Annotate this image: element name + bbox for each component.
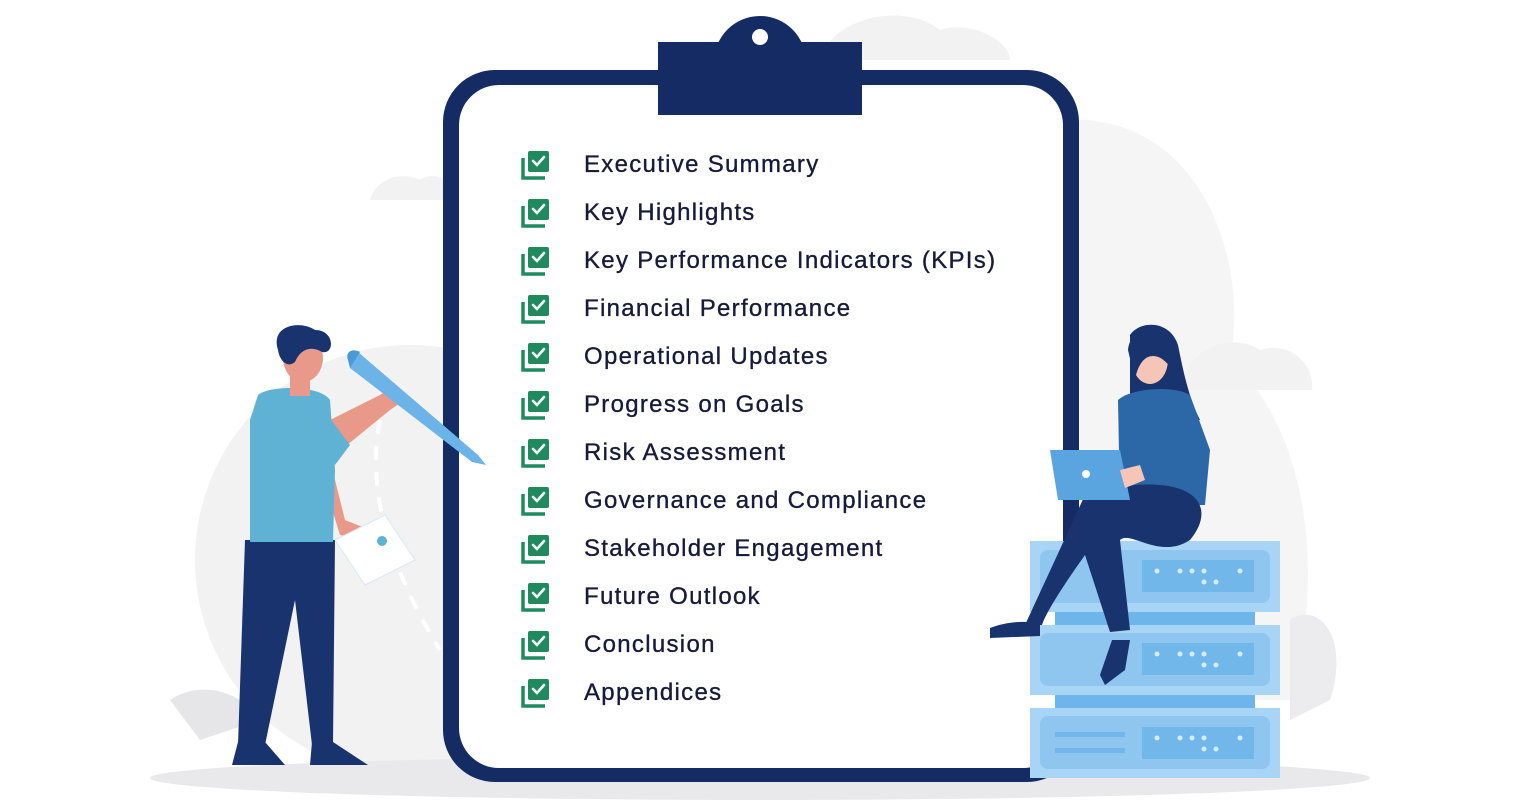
- item: Governance and Compliance: Governance and Compliance: [584, 487, 927, 514]
- item: Appendices: Appendices: [584, 679, 722, 706]
- item: KPIs: Key Performance Indicators (KPIs): [584, 247, 996, 274]
- item: Financial Performance: Financial Performance: [584, 295, 851, 322]
- item: Appendices: [523, 679, 722, 706]
- item: Risk Assessment: Risk Assessment: [584, 439, 786, 466]
- item: Operational Updates: Operational Updates: [584, 343, 829, 370]
- background decorations: [150, 16, 1370, 800]
- clipboard: [443, 16, 1079, 782]
- woman with laptop: [990, 325, 1210, 685]
- item: Future Outlook: Future Outlook: [584, 583, 761, 610]
- checklist: [523, 151, 996, 706]
- item: Progress on Goals: Progress on Goals: [584, 391, 805, 418]
- item: Key Highlights: Key Highlights: [584, 199, 756, 226]
- man with pencil: [232, 325, 486, 765]
- item: Conclusion: Conclusion: [584, 631, 716, 658]
- item: Conclusion: [523, 631, 716, 658]
- item: Stakeholder Engagement: Stakeholder Engagement: [584, 535, 883, 562]
- item: Executive Summary: Executive Summary: [584, 151, 820, 178]
- server stack: [1030, 541, 1280, 778]
